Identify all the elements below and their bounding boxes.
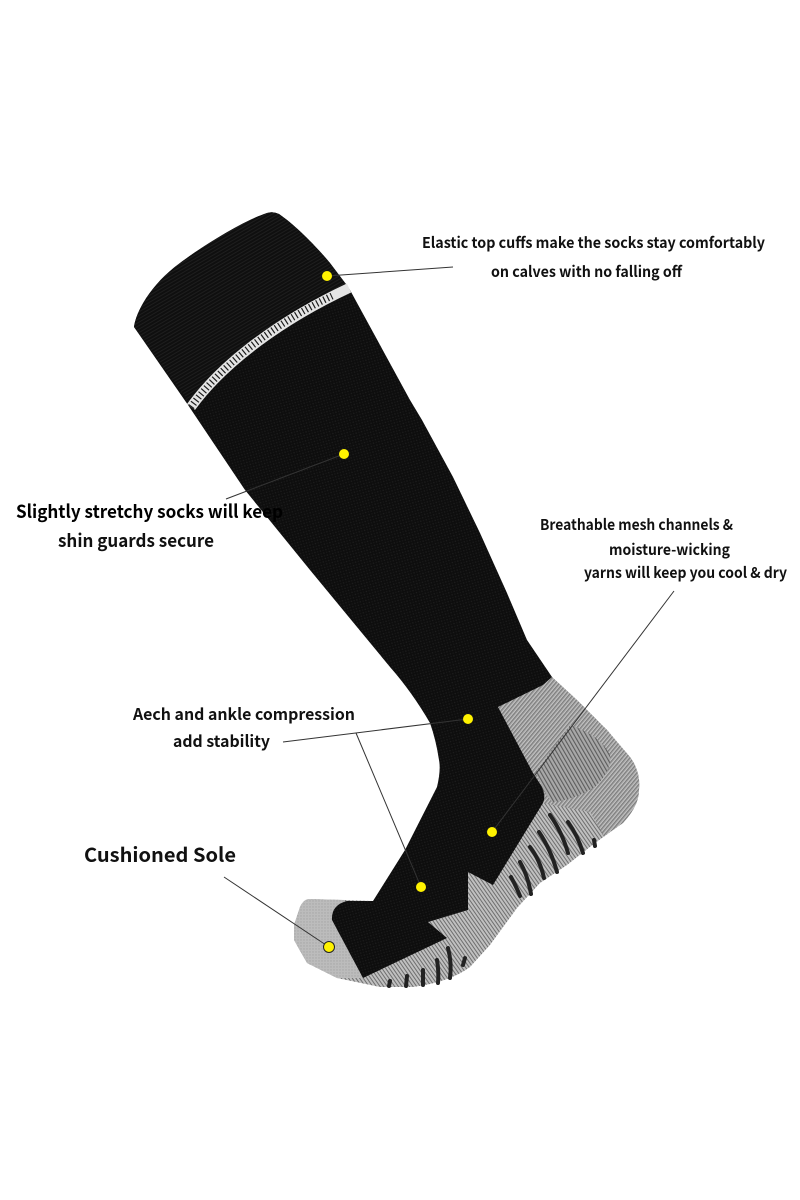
- callout: elastic top cuffs: on calves with no falling off: [491, 261, 683, 282]
- white cuff stripe: [191, 288, 349, 407]
- callout: breathable mesh: yarns will keep you cool & dry: [584, 562, 787, 583]
- sole grip stripes: [389, 815, 595, 986]
- grey heel and sole base: [294, 677, 639, 987]
- callout: breathable mesh: [540, 514, 787, 583]
- callout: arch and ankle compression: [132, 701, 355, 752]
- heel panel: [498, 677, 639, 836]
- callout: shin guards: shin guards secure: [58, 527, 214, 553]
- dark heel weave: [536, 725, 610, 802]
- callout: breathable mesh: moisture-wicking: [609, 539, 730, 560]
- ribbed top cuff: [134, 212, 346, 405]
- callout: breathable mesh: Breathable mesh channels &: [540, 514, 733, 535]
- toe panel: [294, 899, 363, 978]
- callout: elastic top cuffs: Elastic top cuffs make the socks stay comfortably: [422, 232, 765, 253]
- sock illustration: [134, 212, 639, 987]
- marker dots: [322, 271, 497, 952]
- callout: shin guards: Slightly stretchy socks will keep: [16, 498, 283, 524]
- black sock body: [134, 212, 552, 978]
- callout: shin guards: [16, 498, 283, 553]
- callout: elastic top cuffs: [422, 232, 765, 282]
- callout: arch and ankle compression: Aech and ankle compression: [132, 701, 355, 725]
- callout: cushioned sole: Cushioned Sole: [84, 839, 236, 868]
- leader lines: [224, 267, 674, 947]
- callout: arch and ankle compression: add stability: [173, 728, 270, 752]
